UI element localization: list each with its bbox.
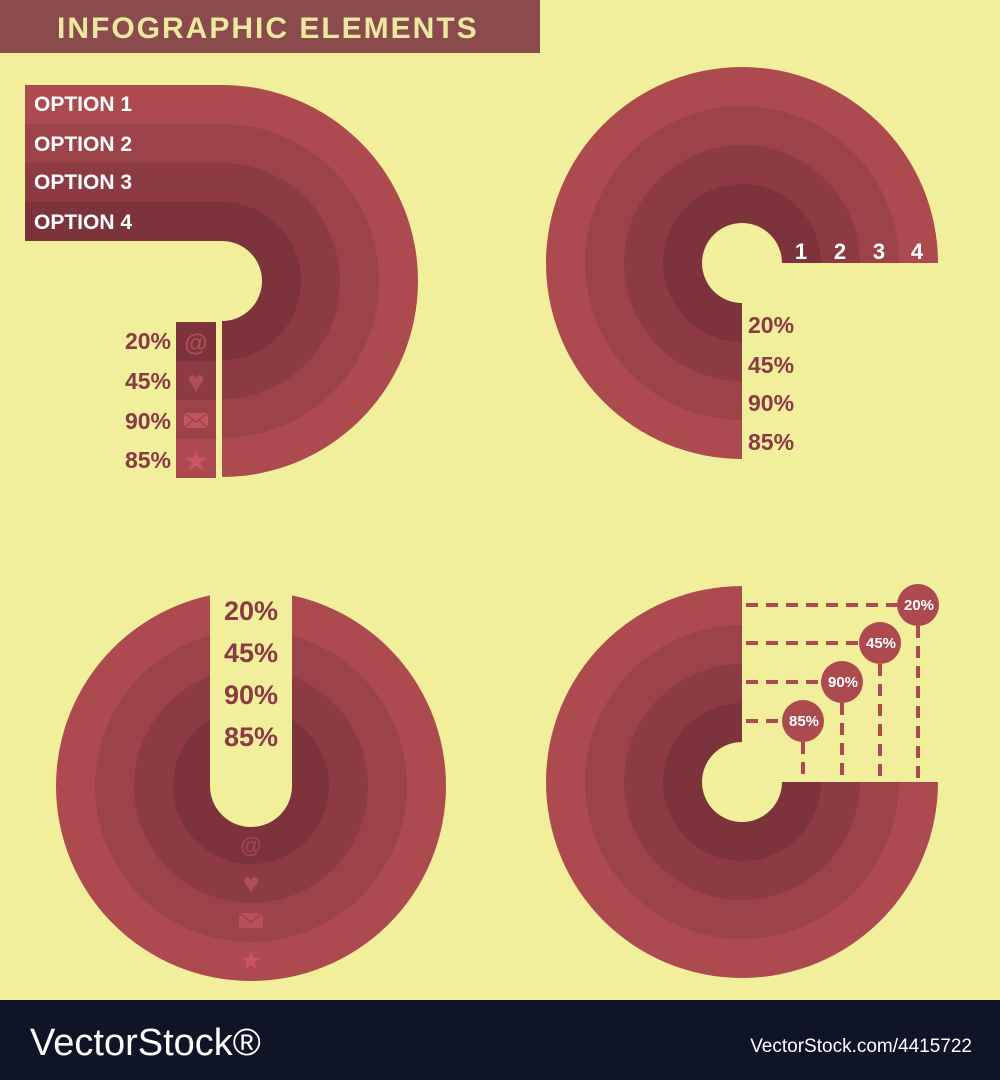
option labels: OPTION 2 xyxy=(34,133,132,156)
chart: bottom-right ring with callouts: 90% xyxy=(828,674,858,691)
option labels xyxy=(34,93,132,234)
percentages: 20% xyxy=(125,328,171,354)
chart: bottom-left ring: @ xyxy=(240,833,262,858)
chart: bottom-left ring: ★ xyxy=(241,948,261,973)
footer: VectorStock® xyxy=(30,1022,261,1064)
chart: top-right ring: 1 xyxy=(795,239,807,264)
chart: bottom-left ring: 45% xyxy=(224,638,278,668)
chart: bottom-right ring with callouts: 85% xyxy=(789,713,819,730)
footer: VectorStock.com/4415722 xyxy=(750,1036,972,1057)
footer xyxy=(0,1000,1000,1080)
option labels: OPTION 3 xyxy=(34,171,132,194)
chart: bottom-right ring with callouts: 45% xyxy=(866,635,896,652)
chart: top-right ring: 3 xyxy=(873,239,885,264)
chart: top-right ring: 2 xyxy=(834,239,846,264)
chart: bottom-left ring: ♥ xyxy=(243,868,259,899)
title xyxy=(0,0,540,53)
chart: top-left options ring xyxy=(25,85,418,478)
icon column xyxy=(176,322,216,478)
chart: top-right ring: 20% xyxy=(748,312,794,338)
chart: bottom-left ring: 85% xyxy=(224,722,278,752)
option labels: OPTION 1 xyxy=(34,93,132,116)
chart: top-right ring xyxy=(546,67,962,473)
percentages xyxy=(125,328,171,473)
percentages: 90% xyxy=(125,408,171,434)
chart: bottom-left ring: 90% xyxy=(224,680,278,710)
percentages: 85% xyxy=(125,447,171,473)
chart: bottom-left ring: 20% xyxy=(224,596,278,626)
title: INFOGRAPHIC ELEMENTS xyxy=(57,12,479,45)
icon column: ♥ xyxy=(187,366,205,399)
chart: top-right ring: 90% xyxy=(748,390,794,416)
icon column: ★ xyxy=(185,448,207,475)
chart: bottom-left ring xyxy=(56,585,446,981)
chart: top-right ring: 85% xyxy=(748,429,794,455)
icon column: @ xyxy=(184,330,208,357)
chart: top-right ring: 4 xyxy=(911,239,924,264)
chart: top-right ring: 45% xyxy=(748,352,794,378)
chart: bottom-right ring with callouts xyxy=(546,575,962,978)
chart: bottom-right ring with callouts: 20% xyxy=(904,597,934,614)
option labels: OPTION 4 xyxy=(34,211,132,234)
percentages: 45% xyxy=(125,368,171,394)
